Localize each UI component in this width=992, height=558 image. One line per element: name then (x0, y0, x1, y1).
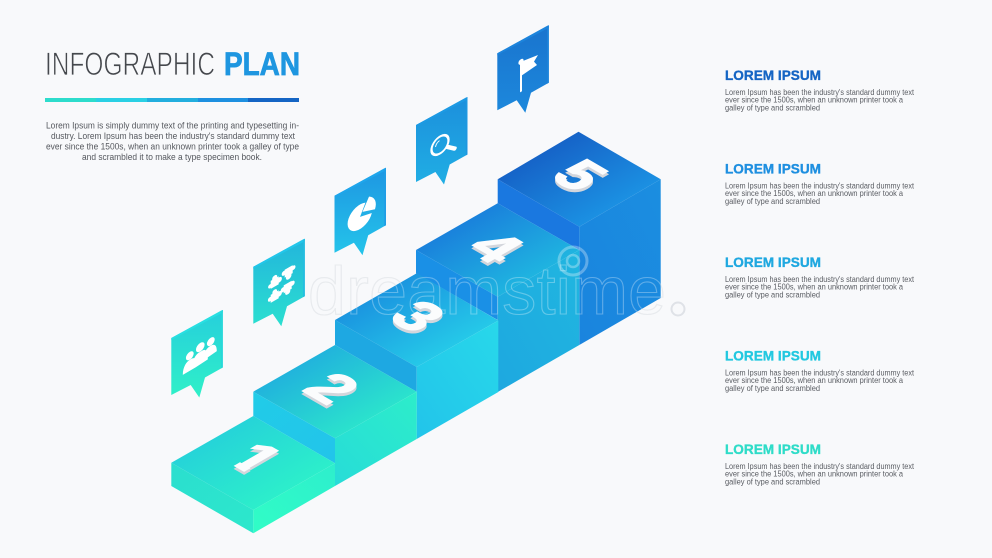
text block 1: ever since the 1500s, when an unknown printer took a (725, 470, 904, 479)
step 1 (171, 416, 335, 533)
watermark outline on background: dreamstime (308, 253, 666, 329)
bubble 1: people icon (171, 310, 223, 398)
number 3: 3 (375, 292, 459, 341)
bubble 2: puzzle icon (253, 239, 305, 326)
number 2: 2 (289, 364, 373, 413)
bubble 3: pie chart icon (334, 168, 386, 255)
intro paragraph: and scrambled it to make a type specimen book. (82, 152, 262, 162)
text block 4: LOREM IPSUM (725, 160, 821, 176)
step 5 (498, 132, 661, 345)
text block 2: ever since the 1500s, when an unknown printer took a (725, 376, 904, 385)
step 2 (253, 345, 417, 486)
number 2: 2 (289, 367, 373, 416)
text block 3: ever since the 1500s, when an unknown printer took a (725, 283, 904, 292)
icon: magnifier (432, 128, 455, 162)
icon: flag (518, 49, 538, 93)
number 4: 4 (453, 223, 537, 272)
text block 2: LOREM IPSUM (725, 348, 821, 364)
intro paragraph: dustry. Lorem Ipsum has been the industry's standard dummy text (51, 131, 295, 141)
text block 3 (725, 254, 915, 299)
text block 1: galley of type and scrambled (725, 477, 820, 486)
number 1: 1 (213, 434, 297, 483)
text block 4 (725, 160, 915, 206)
watermark over the steps: dreamstime (308, 253, 666, 329)
intro paragraph: Lorem Ipsum is simply dummy text of the printing and typesetting in- (46, 120, 299, 130)
title underline (45, 98, 299, 102)
step 4 (416, 203, 579, 392)
number 1 (234, 444, 279, 475)
bubble 4: magnifier icon (416, 97, 468, 184)
title: PLAN (224, 46, 300, 82)
text block 1: LOREM IPSUM (725, 441, 821, 457)
text block 1 (725, 441, 915, 486)
isometric staircase (171, 132, 661, 533)
number 3: 3 (375, 295, 459, 344)
text block 4: ever since the 1500s, when an unknown printer took a (725, 189, 904, 198)
text block 1: Lorem Ipsum has been the industry's standard dummy text (725, 462, 915, 471)
text block 5 (725, 67, 915, 112)
title: INFOGRAPHIC (45, 46, 215, 82)
text block 5: galley of type and scrambled (725, 103, 820, 112)
text block 3: Lorem Ipsum has been the industry's standard dummy text (725, 275, 915, 284)
number 5: 5 (537, 151, 621, 200)
icon: puzzle pieces (268, 263, 296, 306)
icon: pie chart (348, 193, 376, 236)
text block 3: LOREM IPSUM (725, 254, 821, 270)
number 5: 5 (537, 154, 621, 203)
icon: people (183, 333, 217, 375)
number 4: 4 (453, 226, 537, 275)
text block 5: Lorem Ipsum has been the industry's standard dummy text (725, 88, 915, 97)
intro paragraph: ever since the 1500s, when an unknown printer took a galley of type (46, 142, 299, 152)
text block 4: galley of type and scrambled (725, 197, 820, 206)
text block 2: galley of type and scrambled (725, 384, 820, 393)
text block 4: Lorem Ipsum has been the industry's standard dummy text (725, 182, 915, 190)
text block 5: ever since the 1500s, when an unknown printer took a (725, 96, 904, 105)
text block 2: Lorem Ipsum has been the industry's standard dummy text (725, 368, 915, 378)
text block 3: galley of type and scrambled (725, 290, 820, 299)
number 1: 1 (213, 437, 297, 486)
text block 2 (725, 348, 915, 393)
step 3 (335, 273, 498, 439)
bubble 5: flag icon (497, 25, 549, 113)
intro paragraph (46, 120, 299, 162)
text block 5: LOREM IPSUM (725, 67, 821, 83)
